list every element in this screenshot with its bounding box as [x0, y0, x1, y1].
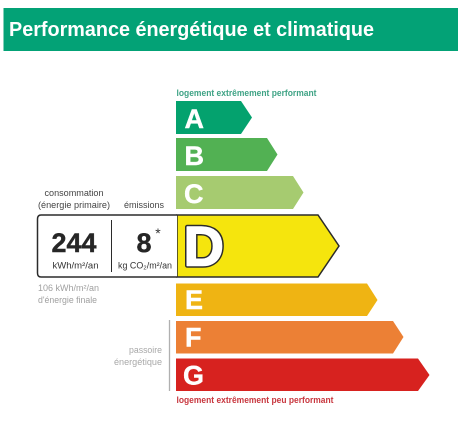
letter D: D — [184, 214, 224, 278]
consumption unit: kWh/m²/an — [52, 260, 98, 270]
top scale label: logement extrêmement performant — [176, 88, 316, 98]
emissions value: 8 — [136, 228, 152, 258]
energy sieve label with bracket: passoire — [129, 345, 162, 355]
final energy note: 106 kWh/m²/an — [38, 283, 99, 293]
consumption column heading — [38, 188, 110, 210]
emissions column heading: émissions — [124, 200, 164, 210]
class F arrow: F — [185, 322, 202, 352]
asterisk: * — [155, 225, 161, 241]
class A arrow: A — [184, 104, 204, 134]
class G arrow: G — [183, 360, 204, 390]
consumption column heading: (énergie primaire) — [38, 200, 110, 210]
class F arrow — [176, 321, 404, 354]
bottom scale label: logement extrêmement peu performant — [176, 395, 334, 405]
energy sieve label with bracket: énergétique — [114, 357, 162, 367]
consumption value: 244 — [52, 228, 96, 258]
emissions unit: kg CO₂/m²/an — [118, 260, 172, 270]
final energy note — [38, 283, 99, 305]
values box — [38, 215, 177, 277]
class D arrow, highlighted — [177, 214, 339, 278]
class G arrow — [176, 358, 430, 391]
class C arrow — [176, 176, 304, 209]
letter D: D — [184, 214, 224, 278]
energy sieve label with bracket — [114, 320, 170, 391]
header banner — [4, 8, 458, 51]
class A arrow — [176, 101, 252, 134]
class B arrow: B — [184, 141, 204, 171]
class E arrow — [176, 284, 378, 316]
class B arrow — [176, 138, 278, 171]
final energy note: d'énergie finale — [38, 295, 97, 305]
consumption column heading: consommation — [44, 188, 104, 198]
class C arrow: C — [184, 179, 204, 209]
class E arrow: E — [185, 285, 203, 315]
title: Performance énergétique et climatique — [9, 19, 374, 41]
